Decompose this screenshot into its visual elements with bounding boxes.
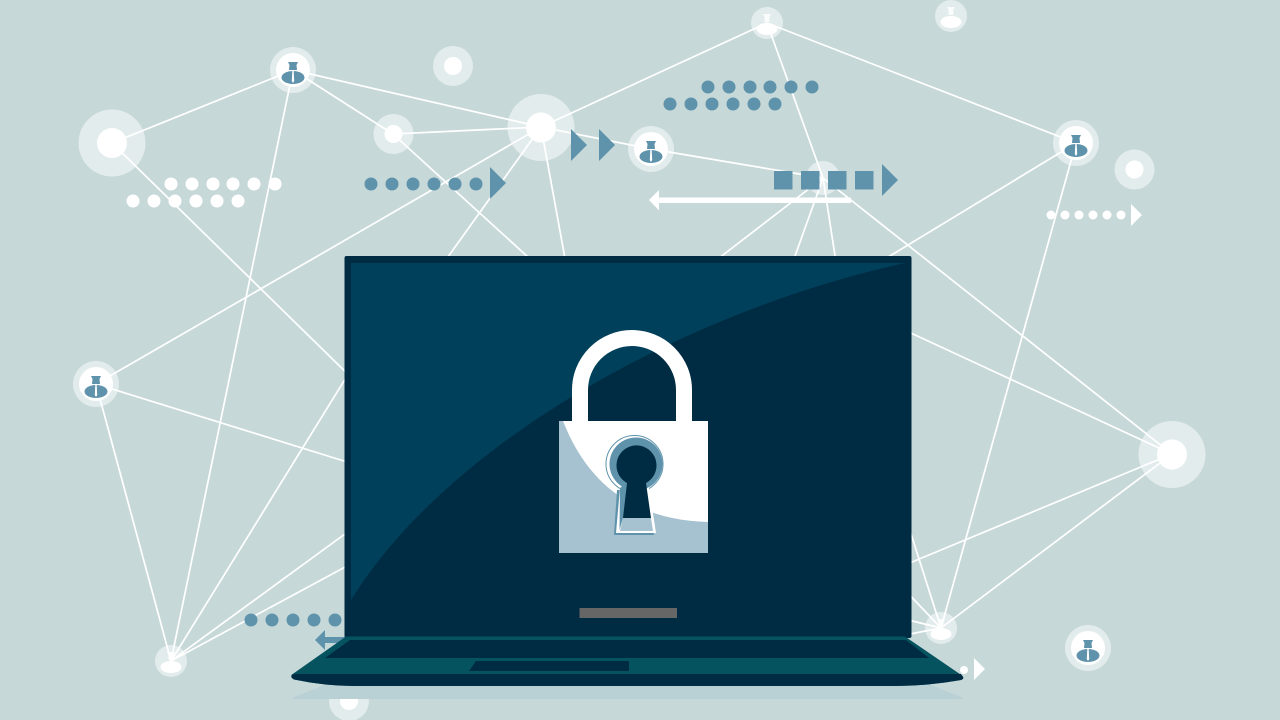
padlock — [559, 338, 708, 553]
node: large left — [78, 110, 146, 176]
dots: blue bottom left — [244, 614, 342, 626]
base outline — [291, 636, 963, 686]
node: white person bottom left — [155, 645, 187, 677]
node: small left centre — [374, 114, 414, 154]
dots: white upper row — [164, 178, 282, 190]
lock body — [559, 421, 708, 553]
base underside — [291, 674, 963, 686]
node: small bottom — [329, 681, 369, 720]
node: behind squares — [806, 161, 840, 195]
arrow: blue squares — [774, 164, 898, 196]
node: white person top — [751, 7, 783, 39]
node: white person bottom right — [925, 612, 957, 644]
node: small right — [1114, 150, 1154, 190]
node: person centre — [628, 126, 674, 172]
node: large centre — [508, 94, 574, 161]
dots: white lower row — [126, 194, 244, 208]
keyhole — [606, 436, 663, 535]
shackle — [580, 338, 684, 421]
dots: blue upper row — [702, 80, 818, 94]
screen highlight — [351, 263, 905, 600]
laptop — [291, 256, 963, 699]
arrow: white bottom right — [960, 658, 985, 680]
node: white person top right — [935, 0, 967, 32]
dots: blue lower row — [664, 98, 782, 110]
arrows: double chevron — [571, 129, 615, 161]
node: person left — [73, 361, 119, 407]
arrow: white left — [649, 190, 851, 210]
arrow: blue bottom left — [315, 630, 350, 650]
status bar — [580, 608, 677, 618]
keyboard well — [325, 640, 929, 658]
trackpad — [469, 661, 629, 671]
laptop shadow — [292, 682, 963, 699]
laptop screen — [344, 256, 912, 638]
node: person top left — [270, 47, 316, 93]
arrow: blue dotted — [364, 167, 506, 199]
body highlight — [563, 421, 708, 522]
arrow: white dotted right — [1046, 204, 1142, 226]
node: small top centre — [433, 46, 473, 86]
network lines — [96, 23, 1172, 661]
laptop base — [291, 636, 963, 686]
node: large right — [1138, 421, 1206, 488]
node: person right — [1053, 120, 1099, 166]
node: person bottom right — [1065, 625, 1111, 671]
